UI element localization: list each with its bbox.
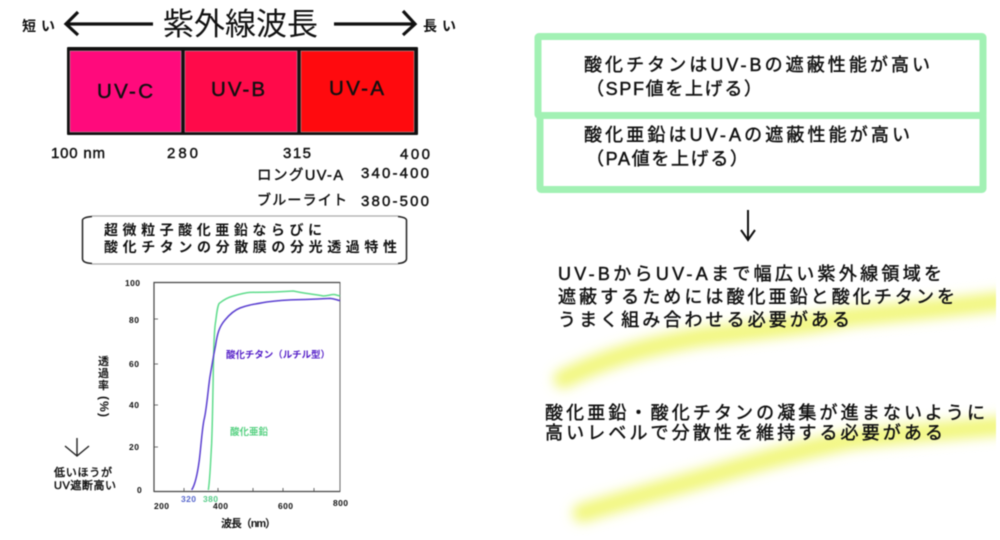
curve: titanium oxide xyxy=(192,298,340,490)
text: combining oxides: 遮蔽するためには酸化亜鉛と酸化チタンを xyxy=(558,287,955,307)
panel: titanium oxide: 酸化チタンはUV-Bの遮蔽性能が高い xyxy=(584,55,930,75)
long UV-A and blue light ranges xyxy=(257,165,429,210)
label: short: 短い xyxy=(22,18,55,34)
x axis numbers: 800 xyxy=(333,498,348,508)
panel: oxide properties xyxy=(538,36,983,190)
segment: UV-A: UV-A xyxy=(329,77,384,100)
cutoff labels: 320 xyxy=(181,494,196,504)
panel: titanium oxide xyxy=(538,36,983,116)
panel: zinc oxide xyxy=(540,116,983,190)
arrow: right xyxy=(334,11,415,35)
long UV-A and blue light ranges: 340-400 xyxy=(361,165,429,182)
text: dispersion: 高いレベルで分散性を維持する必要がある xyxy=(545,423,943,443)
y axis numbers: 0 xyxy=(137,485,142,495)
curve: zinc oxide xyxy=(208,291,340,490)
y axis numbers: 60 xyxy=(129,359,139,369)
y axis numbers: 80 xyxy=(129,315,139,325)
x axis title: 波長（nm） xyxy=(221,516,276,530)
wavelength scale numbers: 100 nm xyxy=(51,145,105,162)
title: wavelength scale xyxy=(22,7,456,42)
x axis numbers xyxy=(154,498,348,511)
wavelength scale numbers: 280 xyxy=(167,145,198,162)
y axis numbers xyxy=(125,278,142,495)
x axis numbers: 400 xyxy=(213,501,228,511)
arrow: down xyxy=(741,210,755,240)
yellow highlight strokes xyxy=(563,300,1000,513)
long UV-A and blue light ranges: 380-500 xyxy=(361,193,429,210)
text: combining oxides xyxy=(558,264,955,330)
caption box xyxy=(82,216,406,264)
long UV-A and blue light ranges: ロングUV-A xyxy=(257,167,343,184)
line chart: transmittance xyxy=(97,278,348,530)
curve label: titanium oxide: 酸化チタン（ルチル型） xyxy=(226,349,330,361)
title: wavelength scale: 紫外線波長 xyxy=(163,7,318,42)
y axis numbers: 40 xyxy=(129,400,139,410)
x axis numbers: 600 xyxy=(278,501,293,511)
y axis title: (%) xyxy=(97,396,111,417)
caption box: 超微粒子酸化亜鉛ならびに xyxy=(104,222,322,238)
segment: UV-B xyxy=(185,51,297,132)
curve label: zinc oxide: 酸化亜鉛 xyxy=(230,426,268,438)
caption box: 酸化チタンの分散膜の分光透過特性 xyxy=(104,239,397,255)
arrow: down, small xyxy=(65,438,89,456)
segment: UV-B: UV-B xyxy=(211,78,265,101)
wavelength scale numbers xyxy=(51,145,430,163)
wavelength scale numbers: 315 xyxy=(283,145,311,162)
y axis title: 透 xyxy=(98,354,109,368)
text: dispersion xyxy=(545,403,985,443)
y axis numbers: 100 xyxy=(125,278,140,288)
text: combining oxides: UV-BからUV-Aまで幅広い紫外線領域を xyxy=(558,264,942,284)
long UV-A and blue light ranges: ブルーライト xyxy=(257,192,347,208)
segment: UV-A xyxy=(301,51,414,132)
chart axes xyxy=(154,282,340,492)
label: long: 長い xyxy=(423,18,456,34)
y axis title: 率 xyxy=(98,378,109,392)
UV spectrum bar xyxy=(67,47,418,135)
text: combining oxides: うまく組み合わせる必要がある xyxy=(558,310,850,330)
cutoff labels: 380 xyxy=(203,494,218,504)
y axis title: 過 xyxy=(98,367,109,380)
cutoff labels xyxy=(181,494,218,504)
y axis numbers: 20 xyxy=(129,442,139,452)
panel: zinc oxide: （PA値を上げる） xyxy=(586,149,748,169)
note: lower means higher UV blocking: UV遮断高い xyxy=(54,478,116,492)
panel: zinc oxide: 酸化亜鉛はUV-Aの遮蔽性能が高い xyxy=(584,125,910,145)
panel: titanium oxide: （SPF値を上げる） xyxy=(586,79,762,99)
arrow: left xyxy=(66,12,153,35)
text: dispersion: 酸化亜鉛・酸化チタンの凝集が進まないように xyxy=(545,403,985,423)
x axis numbers: 200 xyxy=(154,501,169,511)
note: lower means higher UV blocking: 低いほうが xyxy=(54,465,112,479)
segment: UV-C xyxy=(70,51,181,132)
segment: UV-C: UV-C xyxy=(97,80,153,103)
wavelength scale numbers: 400 xyxy=(400,146,430,163)
note: lower means higher UV blocking xyxy=(54,465,116,492)
y axis title xyxy=(97,354,111,417)
